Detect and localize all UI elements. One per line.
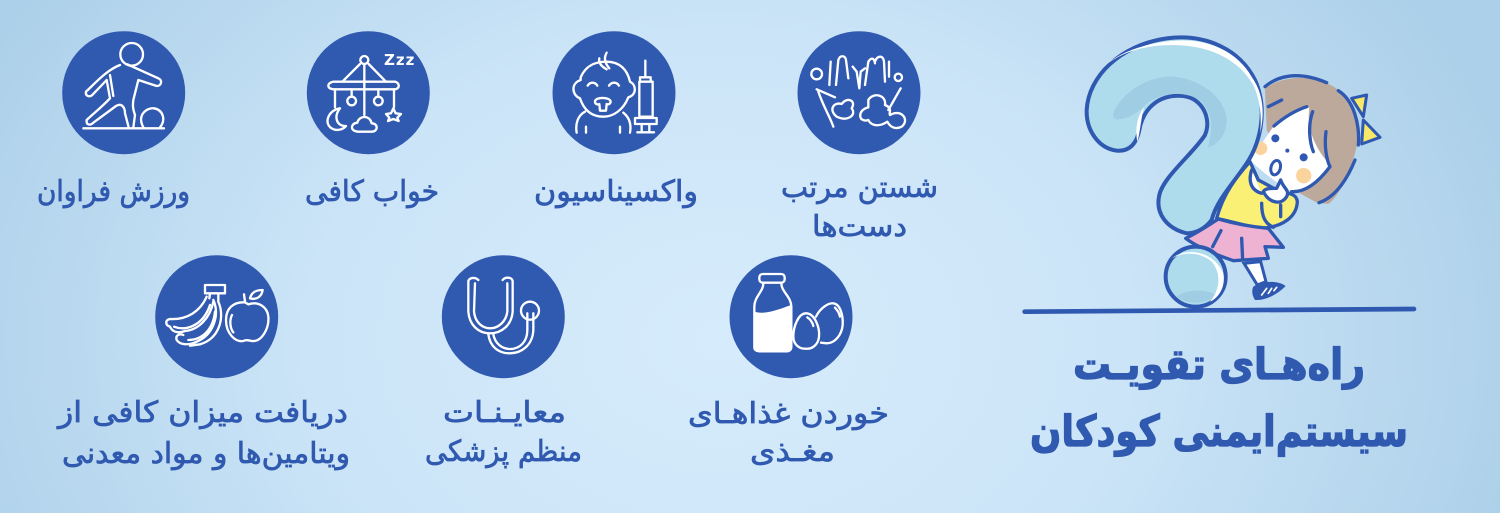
item: hand washing — [781, 31, 938, 243]
label line 2: منظم پزشکی — [425, 434, 582, 469]
item: vaccination — [534, 31, 698, 208]
face — [1250, 107, 1330, 193]
icon: milk bottle and eggs — [754, 274, 843, 351]
item: sufficient sleep — [305, 31, 439, 208]
ball — [1166, 247, 1226, 307]
icon circle — [155, 255, 278, 378]
illustration: girl and question mark — [1025, 37, 1414, 312]
icon: stethoscope — [468, 278, 539, 353]
label: دریافت میزان کافی از — [56, 395, 348, 429]
icon: bananas and apple — [166, 285, 268, 346]
question mark — [1087, 37, 1263, 233]
icon circle — [552, 31, 676, 154]
icon: baby and syringe — [573, 53, 657, 133]
title — [1030, 340, 1408, 457]
label: شستن مرتب — [781, 170, 938, 204]
icon circle — [62, 31, 185, 154]
hair — [1265, 78, 1358, 204]
title line 1: راه‌هـای تقویـت — [1073, 340, 1365, 390]
zzz: Zzz — [384, 51, 415, 69]
skirt — [1186, 219, 1283, 261]
item: vitamins and minerals — [56, 255, 350, 470]
eyes and mouth — [1254, 134, 1311, 183]
hair lines — [1265, 76, 1359, 203]
leg and shoe — [1244, 262, 1266, 285]
icon circle — [730, 255, 852, 378]
item: exercise — [37, 31, 190, 208]
hand — [1250, 170, 1288, 202]
item: nutritious food — [688, 255, 889, 468]
bow — [1352, 95, 1380, 144]
label: خوردن غذاهـای — [688, 396, 889, 430]
label line 2: دست‌ها — [812, 209, 907, 243]
icon: washing hands — [811, 56, 905, 128]
label: خواب کافی — [305, 174, 439, 208]
label line 2: مغـذی — [750, 434, 835, 468]
label: معایـنـات — [443, 395, 566, 429]
label line 2: ویتامین‌ها و مواد معدنی — [62, 436, 350, 470]
shirt — [1217, 162, 1297, 228]
label: واکسیناسیون — [534, 174, 698, 208]
ground line — [1025, 309, 1414, 312]
item: medical checkups — [425, 255, 582, 469]
label: ورزش فراوان — [37, 174, 190, 208]
icon circle — [798, 31, 920, 154]
icon circle — [442, 255, 565, 378]
icon: baby mobile — [328, 56, 401, 132]
icon: soccer player — [83, 43, 164, 128]
title line 2: سیستم‌ایمنی کودکان — [1030, 407, 1408, 457]
icon circle — [307, 31, 430, 154]
